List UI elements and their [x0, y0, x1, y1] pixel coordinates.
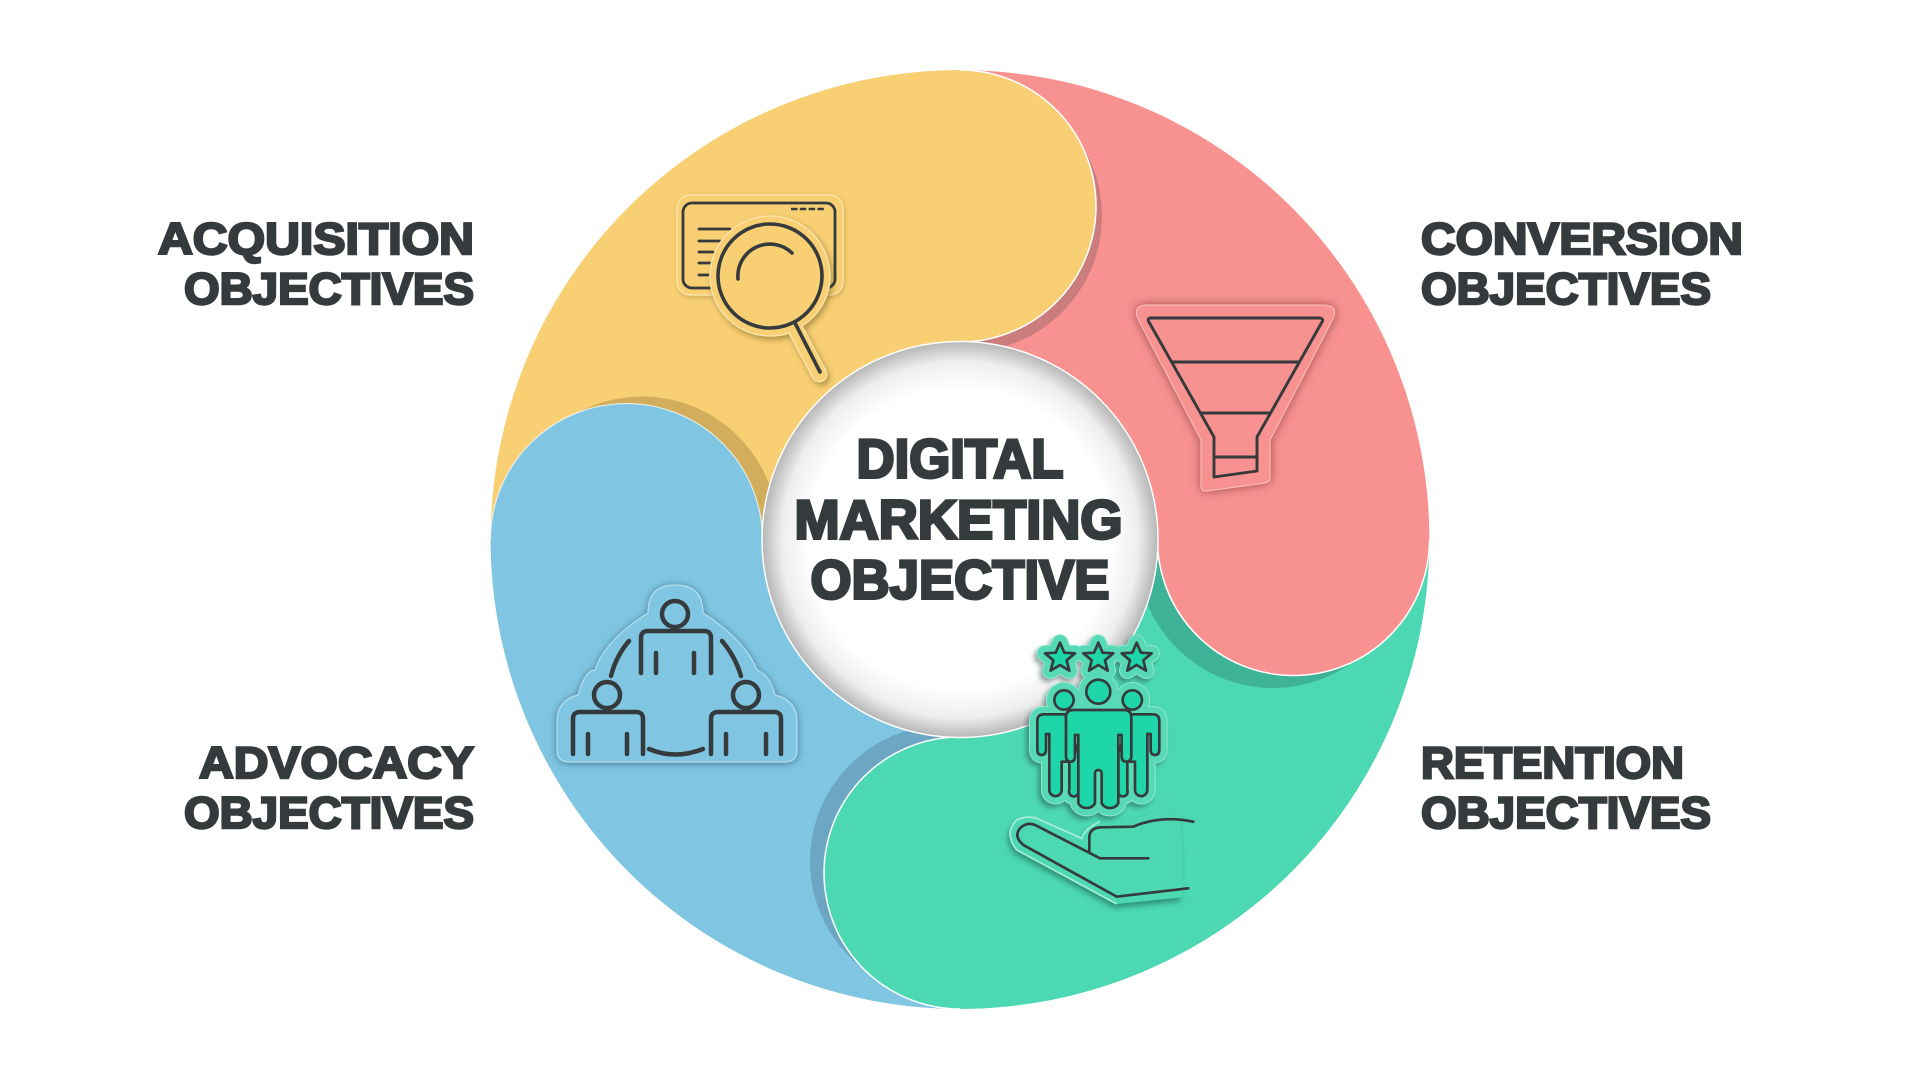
segment: acquisition: [490, 70, 1096, 540]
hand outline: [1017, 819, 1193, 897]
label: advocacy objectives: [184, 739, 474, 838]
label: retention objectives: OBJECTIVES: [1421, 789, 1711, 838]
label: acquisition objectives: [158, 215, 474, 314]
hand sticker edge: [1010, 817, 1117, 904]
center title: OBJECTIVE: [810, 548, 1110, 610]
ring of four segments: [490, 70, 1430, 1009]
shadow: acquisition lobe on conversion: [978, 148, 1102, 346]
label: retention objectives: [1421, 739, 1711, 838]
label: advocacy objectives: OBJECTIVES: [184, 789, 474, 838]
center title: MARKETING: [794, 488, 1122, 550]
label: advocacy objectives: ADVOCACY: [199, 739, 474, 788]
icon: advocacy people network: [557, 585, 797, 762]
icon: funnel: [1136, 305, 1335, 491]
segment: conversion: [960, 70, 1430, 676]
shadow: advocacy lobe on acquisition: [582, 396, 769, 524]
label: conversion objectives: CONVERSION: [1421, 215, 1743, 264]
center circle: [762, 342, 1158, 738]
label: acquisition objectives: OBJECTIVES: [184, 265, 474, 314]
segment: advocacy body: [490, 540, 960, 1009]
center title: DIGITAL: [856, 428, 1064, 490]
shadow: retention lobe on advocacy: [810, 731, 942, 966]
label: conversion objectives: [1421, 215, 1743, 314]
segment: retention: [824, 540, 1430, 1009]
icon: magnifier over web page: [677, 195, 843, 382]
shadow: conversion lobe on retention: [1148, 558, 1350, 688]
center title: [794, 428, 1122, 610]
label: acquisition objectives: ACQUISITION: [158, 215, 474, 264]
label: retention objectives: RETENTION: [1421, 739, 1684, 788]
people and stars sticker: [1037, 643, 1159, 808]
icon: retention people, stars and hand: [1010, 643, 1193, 904]
hand sticker: [1010, 811, 1183, 904]
figures and stars: [1037, 643, 1159, 808]
label: conversion objectives: OBJECTIVES: [1421, 265, 1711, 314]
segment: advocacy lobe: [490, 403, 762, 550]
